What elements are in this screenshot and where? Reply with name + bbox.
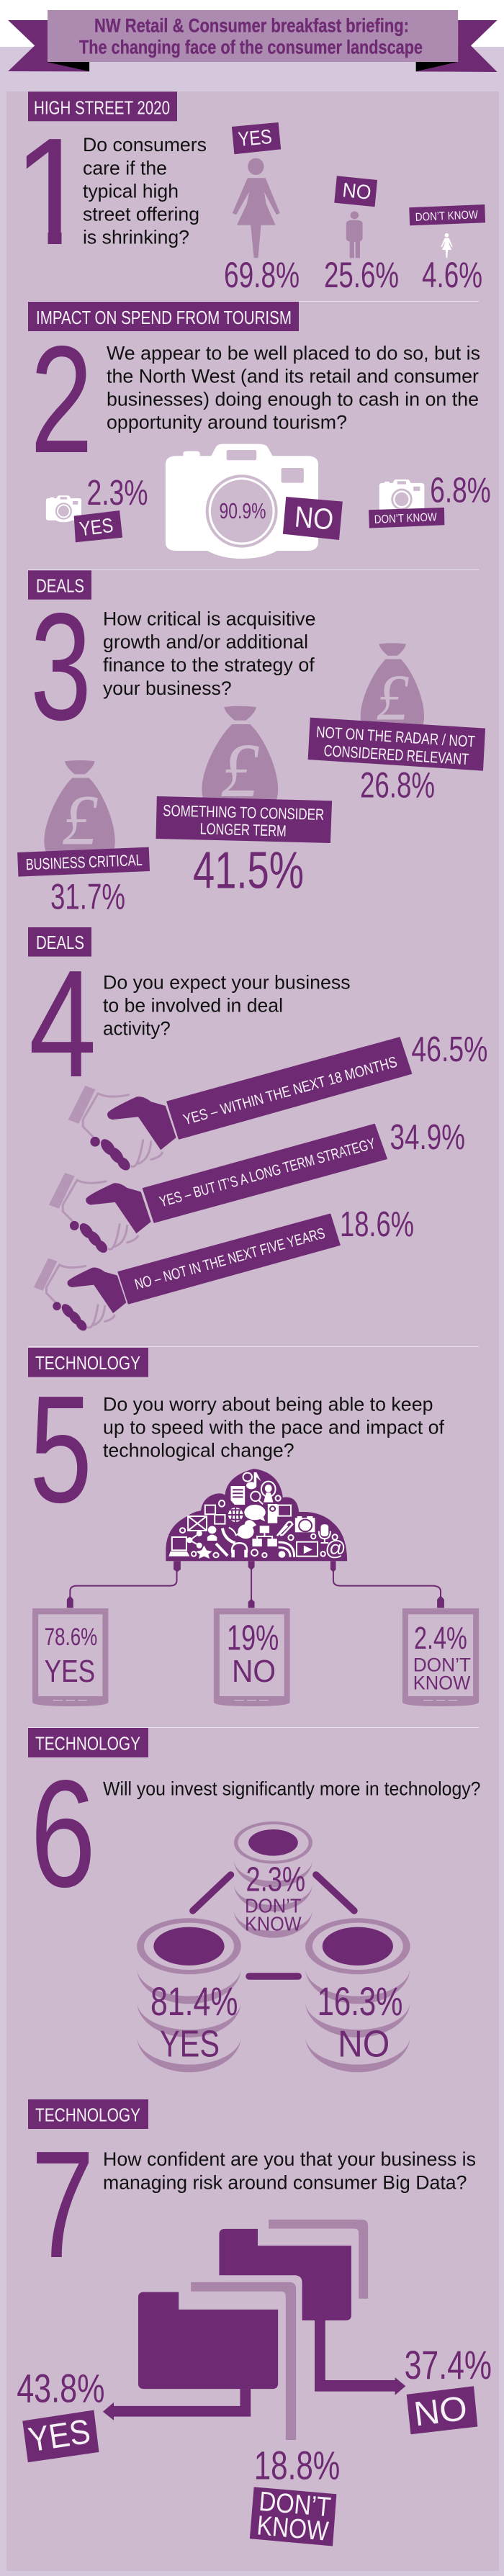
- icon: technology cloud: @: [325, 1537, 346, 1560]
- stat: 43.8%: 43.8%: [17, 2366, 105, 2411]
- question 5 text: up to speed with the pace and impact of: [103, 1417, 445, 1438]
- icon: handshake and bar yes long term: YES – BUT IT’S A LONG TERM STRATEGY: [158, 1135, 377, 1210]
- icon: large camera: [166, 444, 318, 559]
- question 3 text: How critical is acquisitive: [103, 608, 315, 629]
- question 7 text: How confident are you that your business is: [103, 2148, 476, 2170]
- icon: tablet don't know: 2.4%: [414, 1621, 467, 1656]
- numeral 4: 4: [29, 938, 96, 1109]
- stat: 18.8%: 18.8%: [254, 2442, 340, 2488]
- tag: don't know: [369, 508, 444, 528]
- icon: tablet don't know: [402, 1608, 479, 1706]
- panel: question 2 tourism: [28, 302, 491, 559]
- heading: technology: TECHNOLOGY: [35, 1352, 140, 1374]
- question 2 text: [107, 342, 480, 433]
- panel: question 3 deals: [17, 570, 485, 917]
- heading: deals: DEALS: [36, 575, 84, 597]
- heading: deals: DEALS: [36, 932, 84, 953]
- icon: folders with arrows: [103, 2220, 405, 2440]
- numeral 5: 5: [30, 1364, 92, 1534]
- tag: don't know: [409, 204, 485, 225]
- question 7 text: [103, 2148, 476, 2193]
- icon: money bag not on the radar: £: [376, 661, 409, 734]
- question 4 text: to be involved in deal: [103, 995, 283, 1017]
- heading: high street 2020: HIGH STREET 2020: [34, 96, 170, 118]
- stat: 31.7%: 31.7%: [50, 876, 125, 917]
- tag: yes: YES: [26, 2413, 93, 2459]
- numeral 2: 2: [30, 314, 93, 485]
- panel: question 4 deals: [28, 927, 487, 1333]
- icon: money bag consider longer term: £: [220, 729, 259, 814]
- icon: man no: [346, 212, 363, 258]
- question 1 text: [83, 134, 207, 248]
- icon: tablet don't know: DON’T: [413, 1654, 471, 1676]
- numeral 6: 6: [30, 1748, 96, 1919]
- heading: deals: [28, 570, 91, 600]
- icon: database cylinder don't know: DON’T: [245, 1895, 302, 1917]
- tag: don't know: [250, 2487, 336, 2547]
- panel: question 1 high street: [13, 91, 485, 295]
- tag: yes: YES: [237, 125, 273, 150]
- tag: yes: YES: [78, 514, 114, 540]
- icon: database cylinder yes: YES: [160, 2024, 220, 2066]
- icon: handshake and bar yes 18 months: YES – WITHIN THE NEXT 18 MONTHS: [181, 1054, 399, 1128]
- question 7 text: managing risk around consumer Big Data?: [103, 2171, 467, 2193]
- question 1 text: street offering: [83, 204, 199, 225]
- question 1 text: Do consumers: [83, 134, 207, 156]
- tag: no: [283, 497, 343, 540]
- question 2 text: the North West (and its retail and consumer: [107, 365, 479, 387]
- icon: money bag business critical: £: [62, 780, 99, 860]
- question 1 text: is shrinking?: [83, 227, 189, 248]
- heading: deals: [28, 927, 91, 957]
- icon: tablet yes: [32, 1608, 108, 1706]
- question 1 text: care if the: [83, 157, 167, 179]
- tag: no: NO: [293, 500, 335, 536]
- icon: tablet yes: YES: [45, 1654, 95, 1689]
- stat: 2.3%: 2.3%: [86, 474, 148, 513]
- tag: not on the radar: [308, 718, 485, 771]
- tag: yes: [232, 122, 281, 154]
- icon: database cylinder don't know: [234, 1821, 312, 1938]
- heading: technology: TECHNOLOGY: [35, 1733, 140, 1755]
- tag: don't know: KNOW: [256, 2510, 330, 2547]
- question 5 text: technological change?: [103, 1440, 294, 1462]
- tag: no: NO: [412, 2390, 469, 2433]
- question 4 text: activity?: [103, 1018, 171, 1040]
- numeral 1: 1: [13, 106, 91, 276]
- question 5 text: Do you worry about being able to keep: [103, 1393, 433, 1415]
- icon: database cylinder no: 16.3%: [318, 1978, 402, 2024]
- question 3 text: your business?: [103, 677, 232, 699]
- question 1 text: typical high: [83, 180, 179, 202]
- icon: database cylinder no: NO: [338, 2024, 390, 2066]
- stat: 69.8%: 69.8%: [224, 255, 300, 295]
- heading: impact on spend from tourism: [28, 302, 299, 331]
- icon: handshake and bar no: NO – NOT IN THE NEXT FIVE YEARS: [133, 1225, 327, 1293]
- heading: technology: [28, 2099, 148, 2129]
- question 5 text: [103, 1393, 445, 1462]
- stat: 41.5%: 41.5%: [193, 842, 304, 899]
- numeral 3: 3: [30, 581, 91, 752]
- question 2 text: We appear to be well placed to do so, but is: [107, 342, 480, 364]
- tag: business critical: BUSINESS CRITICAL: [25, 851, 143, 873]
- connectors from cloud to tablets: [67, 1561, 444, 1608]
- title ribbon: [8, 10, 498, 72]
- stat: 90.9%: 90.9%: [219, 498, 266, 523]
- heading: impact on spend from tourism: IMPACT ON SPEND FROM TOURISM: [36, 307, 292, 328]
- stat: 34.9%: 34.9%: [390, 1118, 465, 1157]
- stat: 18.6%: 18.6%: [340, 1205, 414, 1244]
- tag: no: [334, 176, 377, 207]
- icon: tablet no: NO: [232, 1654, 276, 1689]
- icon: database cylinder don't know: KNOW: [245, 1913, 302, 1935]
- panel: question 5 technology: [28, 1348, 479, 1706]
- question 4 text: [103, 971, 351, 1040]
- numeral 7: 7: [31, 2119, 94, 2289]
- question 3 text: [103, 608, 315, 699]
- connectors between cylinders: [193, 1875, 354, 1976]
- heading: technology: TECHNOLOGY: [35, 2104, 140, 2126]
- question 2 text: opportunity around tourism?: [107, 412, 347, 433]
- tag: don't know: DON’T KNOW: [374, 511, 438, 526]
- question 3 text: finance to the strategy of: [103, 654, 315, 676]
- title ribbon: NW Retail & Consumer breakfast briefing:: [94, 14, 409, 36]
- heading: high street 2020: [28, 91, 177, 121]
- icon: handshake and bar yes long term: [49, 1125, 387, 1255]
- stat: 25.6%: 25.6%: [324, 255, 399, 295]
- icon: tablet no: [214, 1608, 290, 1706]
- icon: money bag consider longer term: [202, 706, 278, 814]
- tag: something to consider: LONGER TERM: [199, 819, 287, 840]
- panel: question 6 technology: [28, 1728, 481, 2072]
- tag: no: NO: [341, 179, 372, 204]
- icon: small camera yes: [46, 495, 81, 522]
- icon: small camera don't know: [379, 479, 424, 513]
- question 2 text: businesses) doing enough to cash in on the: [107, 388, 479, 410]
- icon: money bag not on the radar: [361, 643, 424, 734]
- title ribbon: The changing face of the consumer landscape: [79, 36, 423, 58]
- icon: database cylinder yes: 81.4%: [150, 1978, 238, 2024]
- tag: don't know: DON’T: [258, 2487, 332, 2523]
- icon: handshake and bar no: [34, 1214, 340, 1333]
- tag: something to consider: [156, 796, 332, 843]
- icon: database cylinder yes: [137, 1918, 241, 2072]
- icon: small white woman: [441, 233, 453, 258]
- tag: business critical: [17, 847, 150, 877]
- icon: tablet no: 19%: [227, 1619, 279, 1658]
- question 4 text: Do you expect your business: [103, 971, 351, 993]
- stat: 26.8%: 26.8%: [360, 765, 435, 805]
- stat: 4.6%: 4.6%: [422, 255, 482, 295]
- icon: technology cloud: [166, 1469, 347, 1561]
- icon: woman yes: [233, 158, 280, 258]
- heading: technology: [28, 1728, 148, 1757]
- icon: money bag business critical: [44, 760, 115, 860]
- icon: tablet don't know: KNOW: [413, 1672, 471, 1694]
- icon: database cylinder no: [305, 1918, 410, 2072]
- tag: don't know: DON’T KNOW: [415, 209, 479, 224]
- icon: database cylinder don't know: 2.3%: [246, 1861, 305, 1899]
- question 3 text: growth and/or additional: [103, 631, 308, 653]
- icon: tablet yes: 78.6%: [45, 1623, 97, 1651]
- heading: technology: [28, 1348, 148, 1377]
- tag: something to consider: SOMETHING TO CONSIDER: [163, 801, 324, 824]
- icon: handshake and bar yes 18 months: [68, 1037, 411, 1172]
- panel: question 7 technology: [17, 2099, 492, 2547]
- question 6 text: Will you invest significantly more in technology?: [103, 1778, 481, 1799]
